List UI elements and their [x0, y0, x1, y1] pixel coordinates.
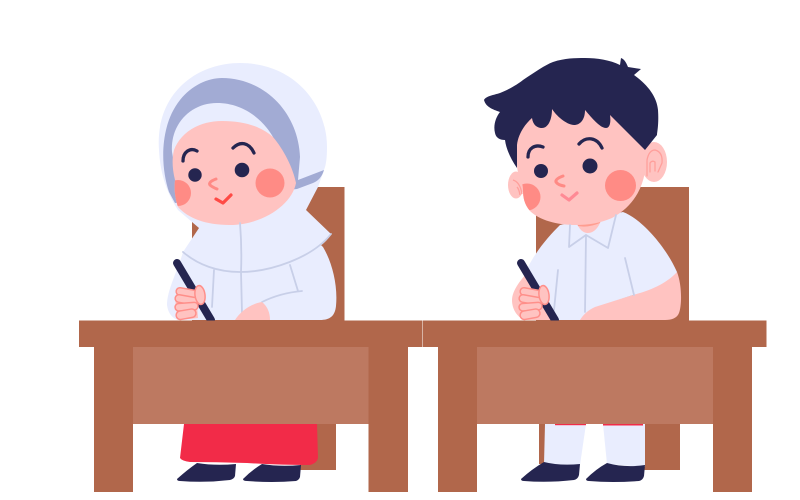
- forearm: girl: [235, 302, 270, 320]
- body: girl blouse: [167, 225, 336, 320]
- shoes: girl: [177, 463, 301, 482]
- inner hood band: [172, 103, 273, 175]
- chair legs: boy: [539, 424, 680, 470]
- ears: [508, 142, 667, 198]
- chair leg: girl: [300, 424, 336, 470]
- face: boy: [514, 105, 646, 225]
- shirt: [528, 212, 677, 320]
- left arm: boy: [512, 270, 560, 320]
- skirt: [180, 424, 318, 465]
- pen: boy: [521, 263, 555, 320]
- hand: boy: [519, 285, 550, 320]
- shirt seam lines: [554, 215, 634, 312]
- hood: girl: [159, 63, 331, 272]
- shoes: boy: [521, 462, 645, 482]
- hair: [484, 58, 658, 168]
- chair back: girl: [192, 187, 344, 321]
- illustration: two students at desks: [79, 58, 766, 492]
- right arm: boy: [578, 272, 681, 320]
- chair back: boy: [536, 187, 689, 321]
- neck shadow: [576, 219, 601, 227]
- hood shadow band: [163, 78, 324, 203]
- girl student: [159, 63, 344, 482]
- trousers: [544, 424, 645, 467]
- neck: [576, 220, 601, 233]
- hand: girl: [175, 285, 206, 320]
- desk: left: [79, 320, 422, 492]
- trouser shadow line: [555, 424, 643, 426]
- boy student: [484, 58, 689, 482]
- garment seam lines: girl: [183, 223, 331, 313]
- pen: girl: [177, 263, 211, 320]
- desk: right: [423, 320, 766, 492]
- face: girl: [165, 121, 296, 225]
